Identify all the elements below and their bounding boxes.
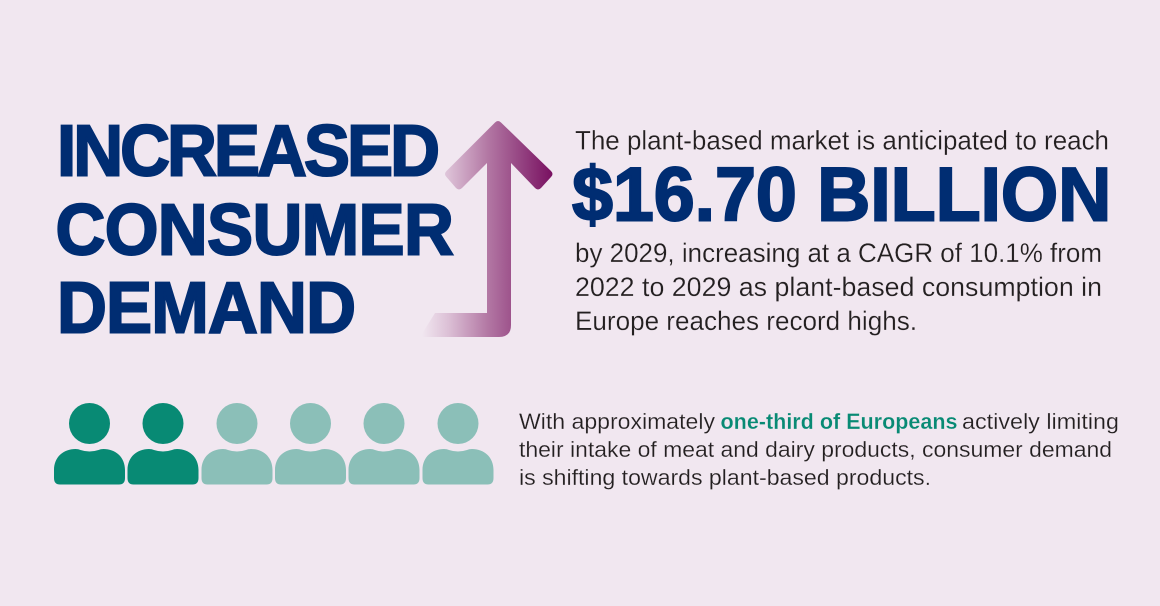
consumer demand text: is shifting towards plant-based products.	[519, 465, 931, 490]
title: CONSUMER	[56, 189, 454, 270]
consumer demand text	[519, 409, 1119, 490]
consumer demand text: With approximately	[519, 409, 715, 434]
consumer demand text: their intake of meat and dairy products, consumer demand	[519, 437, 1112, 462]
market text intro: The plant-based market is anticipated to reach	[575, 126, 1109, 156]
people icons: one-third highlighted	[54, 403, 494, 484]
market text detail	[575, 238, 1102, 336]
consumer demand text: one-third of Europeans	[720, 409, 958, 434]
title	[56, 110, 454, 348]
market text detail: 2022 to 2029 as plant-based consumption in	[575, 272, 1102, 302]
market text detail: Europe reaches record highs.	[575, 306, 917, 336]
consumer demand text: actively limiting	[962, 409, 1119, 434]
title: INCREASED	[57, 110, 440, 191]
market text detail: by 2029, increasing at a CAGR of 10.1% from	[575, 238, 1102, 268]
arrow: upward growth	[420, 121, 552, 337]
market value: $16.70 BILLION	[572, 152, 1111, 237]
title: DEMAND	[57, 267, 356, 348]
